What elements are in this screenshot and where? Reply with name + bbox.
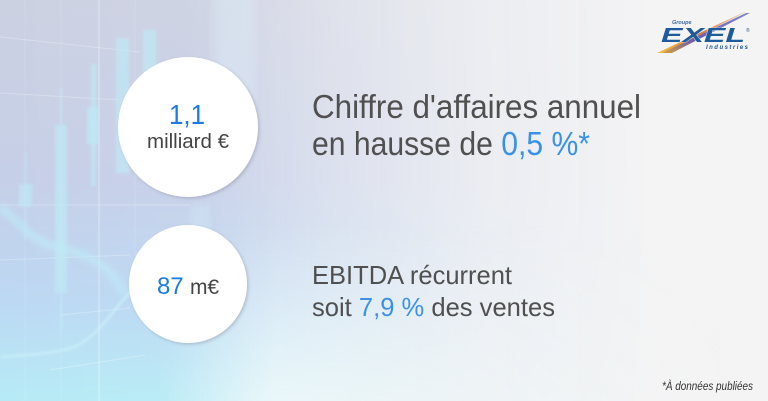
logo registered mark: ®	[746, 27, 750, 34]
logo rainbow swoosh	[657, 12, 750, 53]
unit: milliard €: milliard €	[147, 131, 229, 153]
stat circle: 87 m€	[129, 225, 247, 343]
text: recurring EBITDA	[312, 260, 555, 322]
background chart: grid and candlesticks	[0, 0, 210, 401]
text: recurring EBITDA: soit 7,9 % des ventes	[312, 292, 555, 322]
logo caption: Industries: Industries	[706, 45, 749, 51]
stat circle: 1,1 milliard €	[118, 57, 258, 197]
value: 1,1: 1,1	[169, 99, 205, 130]
background	[0, 0, 534, 401]
logo caption: Groupe: Groupe	[672, 20, 692, 26]
heading: annual revenue: Chiffre d'affaires annuel	[312, 88, 641, 125]
heading: annual revenue	[312, 88, 641, 162]
heading: annual revenue: en hausse de 0,5 %*	[312, 125, 590, 162]
value and unit: 87 m€: 87 m€	[157, 273, 219, 300]
logo: Groupe Exel Industries	[657, 12, 750, 53]
text: recurring EBITDA: EBITDA récurrent	[312, 260, 513, 290]
logo wordmark: EXEL	[661, 25, 745, 47]
